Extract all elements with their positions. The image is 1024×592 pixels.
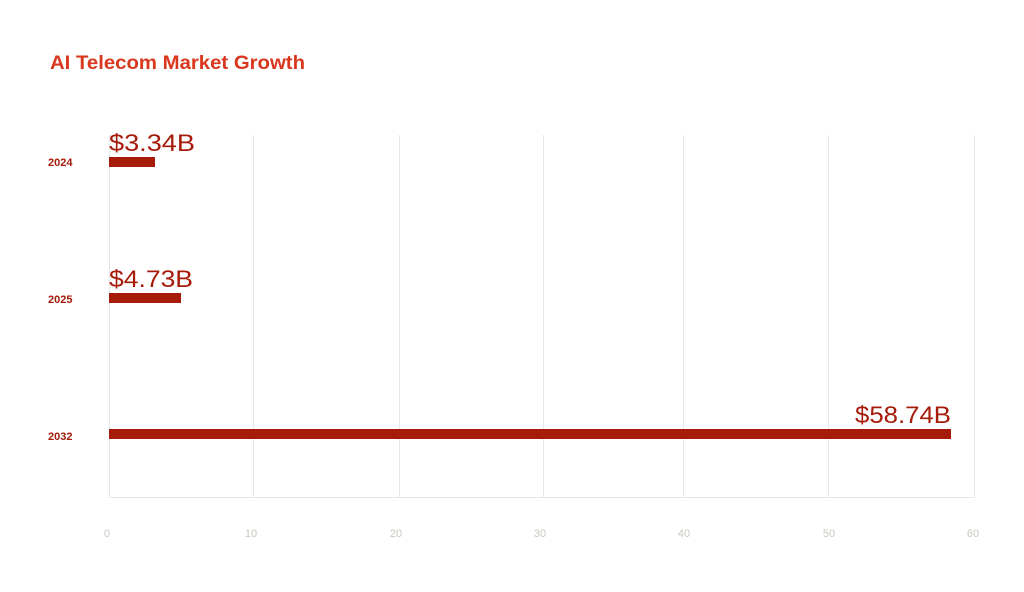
y axis labels bbox=[48, 157, 73, 443]
x axis labels: 0 bbox=[104, 528, 110, 540]
x axis labels: 40 bbox=[678, 528, 690, 540]
bar 2032 bbox=[109, 402, 951, 439]
bar 2032: $58.74B bbox=[855, 402, 951, 429]
x axis labels: 60 bbox=[967, 528, 979, 540]
x axis labels bbox=[104, 528, 979, 540]
bar 2024 bbox=[109, 130, 195, 167]
bar 2024: $3.34B bbox=[109, 130, 195, 157]
x axis labels: 30 bbox=[534, 528, 546, 540]
chart bbox=[48, 130, 979, 540]
y axis labels: 2024 bbox=[48, 157, 73, 169]
y axis labels: 2032 bbox=[48, 431, 72, 443]
x axis labels: 10 bbox=[245, 528, 257, 540]
bar 2025: $4.73B bbox=[109, 266, 193, 293]
bar 2025 bbox=[109, 266, 193, 303]
x axis labels: 20 bbox=[390, 528, 402, 540]
y axis labels: 2025 bbox=[48, 294, 72, 306]
title: AI Telecom Market Growth bbox=[50, 53, 305, 74]
x axis labels: 50 bbox=[823, 528, 835, 540]
